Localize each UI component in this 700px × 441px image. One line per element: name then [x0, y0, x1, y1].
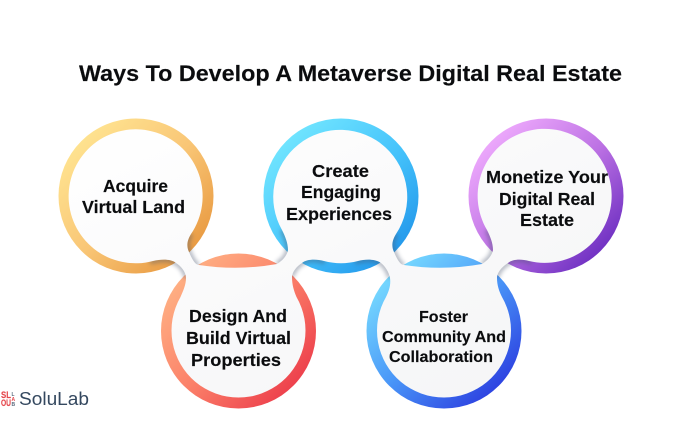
label: foster community and collaboration: Collaboration	[389, 349, 493, 366]
label: acquire virtual land: Acquire	[103, 176, 168, 196]
label: acquire virtual land: Virtual Land	[82, 197, 185, 217]
logo mark: OU	[1, 398, 11, 408]
logo mark: A	[12, 397, 16, 403]
label: create engaging experiences	[286, 161, 392, 224]
logo: SoluLab	[1, 388, 89, 409]
logo wordmark: SoluLab	[19, 388, 89, 409]
label: design and build virtual properties: Properties	[191, 350, 281, 370]
title: Ways To Develop A Metaverse Digital Real Estate	[79, 61, 622, 86]
label: foster community and collaboration	[382, 309, 506, 366]
label: design and build virtual properties: Build Virtual	[186, 328, 291, 348]
label: monetize your digital real estate: Estate	[520, 210, 574, 230]
label: monetize your digital real estate: Monetize Your	[486, 167, 608, 187]
logo mark: SL	[1, 390, 11, 400]
ring: foster community	[366, 254, 522, 408]
logo mark: B	[12, 402, 16, 408]
label: foster community and collaboration: Community And	[382, 329, 506, 346]
label: create engaging experiences: Create	[312, 161, 369, 181]
ring: monetize	[468, 118, 624, 274]
label: foster community and collaboration: Foster	[419, 309, 468, 326]
ring: design and build	[161, 254, 316, 408]
label: create engaging experiences: Experiences	[286, 204, 392, 224]
label: design and build virtual properties: Design And	[189, 306, 287, 326]
label: create engaging experiences: Engaging	[301, 182, 381, 202]
logo mark	[1, 390, 16, 408]
label: monetize your digital real estate	[486, 167, 608, 230]
label: acquire virtual land	[82, 176, 185, 217]
ring: acquire virtual land	[58, 118, 214, 274]
connected inner white shape	[69, 129, 612, 398]
label: monetize your digital real estate: Digital Real	[499, 189, 595, 209]
neck shadows	[150, 230, 532, 278]
ring: create experiences	[264, 118, 418, 274]
logo mark: L	[12, 392, 15, 398]
label: design and build virtual properties	[186, 306, 291, 370]
linked circles diagram	[58, 118, 624, 408]
